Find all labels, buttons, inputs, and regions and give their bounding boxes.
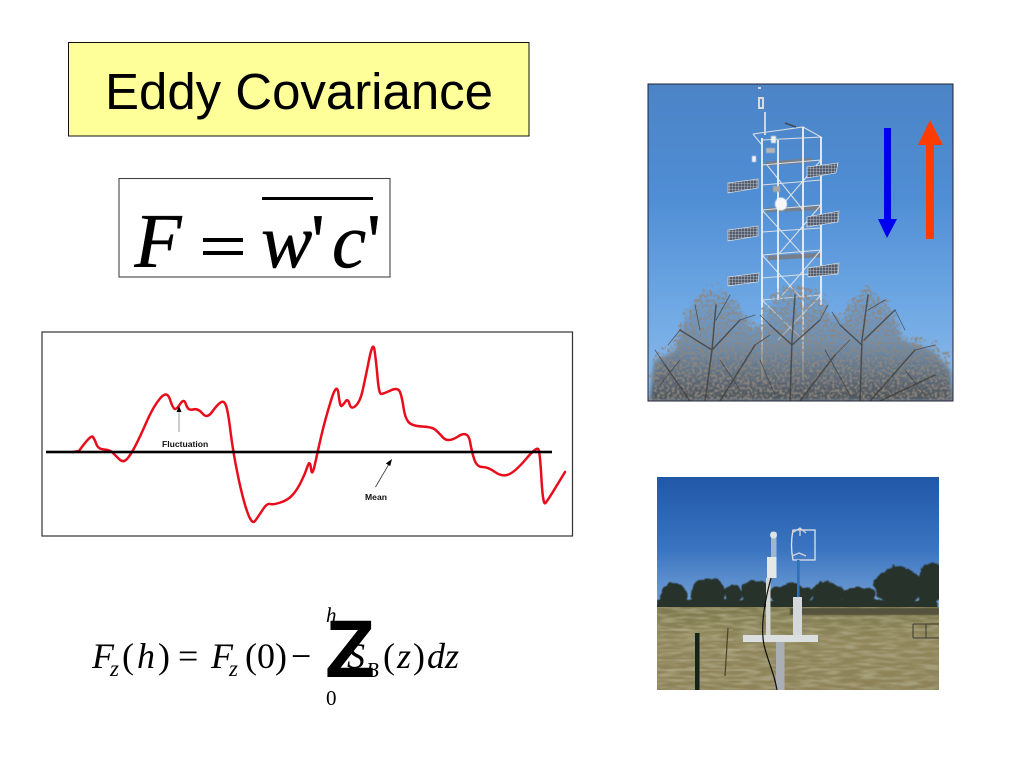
- fence post: [695, 633, 700, 690]
- integrand: S: [347, 636, 365, 676]
- photo: field instruments: [657, 477, 944, 690]
- left-hand side: ): [158, 636, 170, 676]
- integrand: z: [396, 636, 411, 676]
- equation text: ': [311, 198, 325, 284]
- equation text: F: [134, 198, 182, 284]
- red upward arrow: [918, 120, 943, 239]
- equals sign: [203, 238, 243, 255]
- chart panel: fluctuation and mean: [42, 332, 572, 536]
- mean label: Mean: [365, 492, 387, 502]
- sky: [657, 477, 939, 609]
- gas analyzer: [766, 532, 777, 635]
- cable: [763, 578, 777, 690]
- integral equation: [91, 603, 459, 710]
- sky: [648, 84, 953, 401]
- integral upper limit: h: [326, 603, 336, 627]
- subscripts: z: [109, 656, 119, 681]
- mean arrow: [376, 459, 392, 487]
- tower instruments: [752, 136, 787, 210]
- tree line: [657, 563, 944, 611]
- left-hand side: (: [122, 636, 134, 676]
- equation text: w: [261, 198, 312, 284]
- left-hand side: F: [210, 636, 234, 676]
- photo: flux tower: [648, 84, 953, 401]
- fluctuation label: Fluctuation: [162, 439, 208, 449]
- integrand: (: [383, 636, 395, 676]
- tower structure: [753, 88, 822, 380]
- red signal curve: [73, 347, 565, 522]
- integrand subscript: B: [366, 658, 379, 682]
- fence: [657, 630, 770, 680]
- mean line: [46, 451, 552, 453]
- integrand: dz: [427, 636, 459, 676]
- crossbar: [743, 635, 818, 642]
- solar panels: [728, 163, 839, 286]
- bare trees: [650, 285, 953, 401]
- left-hand side: (0): [245, 636, 287, 676]
- blue downward arrow: [878, 128, 897, 238]
- title box: [68, 42, 529, 136]
- small pen: [913, 624, 939, 638]
- left-hand side: h: [137, 636, 155, 676]
- support pole: [776, 642, 784, 690]
- instrument mast: [743, 528, 818, 690]
- left-hand side: −: [291, 636, 311, 676]
- integrand: ): [413, 636, 425, 676]
- title text: Eddy Covariance: [105, 63, 493, 120]
- photo border: [648, 84, 953, 401]
- equation text: ': [367, 198, 381, 284]
- left-hand side: F: [91, 636, 115, 676]
- thin fence stake: [725, 628, 728, 676]
- integral sign rendered as bold Z: Z: [325, 604, 375, 695]
- subscripts: z: [228, 656, 238, 681]
- integral lower limit: 0: [326, 686, 336, 710]
- fluctuation arrow: [176, 406, 182, 432]
- overbar: [262, 197, 373, 200]
- equation box: F = w'c': [119, 178, 390, 284]
- field: [657, 607, 939, 690]
- sonic anemometer: [792, 528, 815, 637]
- left-hand side: =: [178, 636, 198, 676]
- equation text: c: [332, 198, 366, 284]
